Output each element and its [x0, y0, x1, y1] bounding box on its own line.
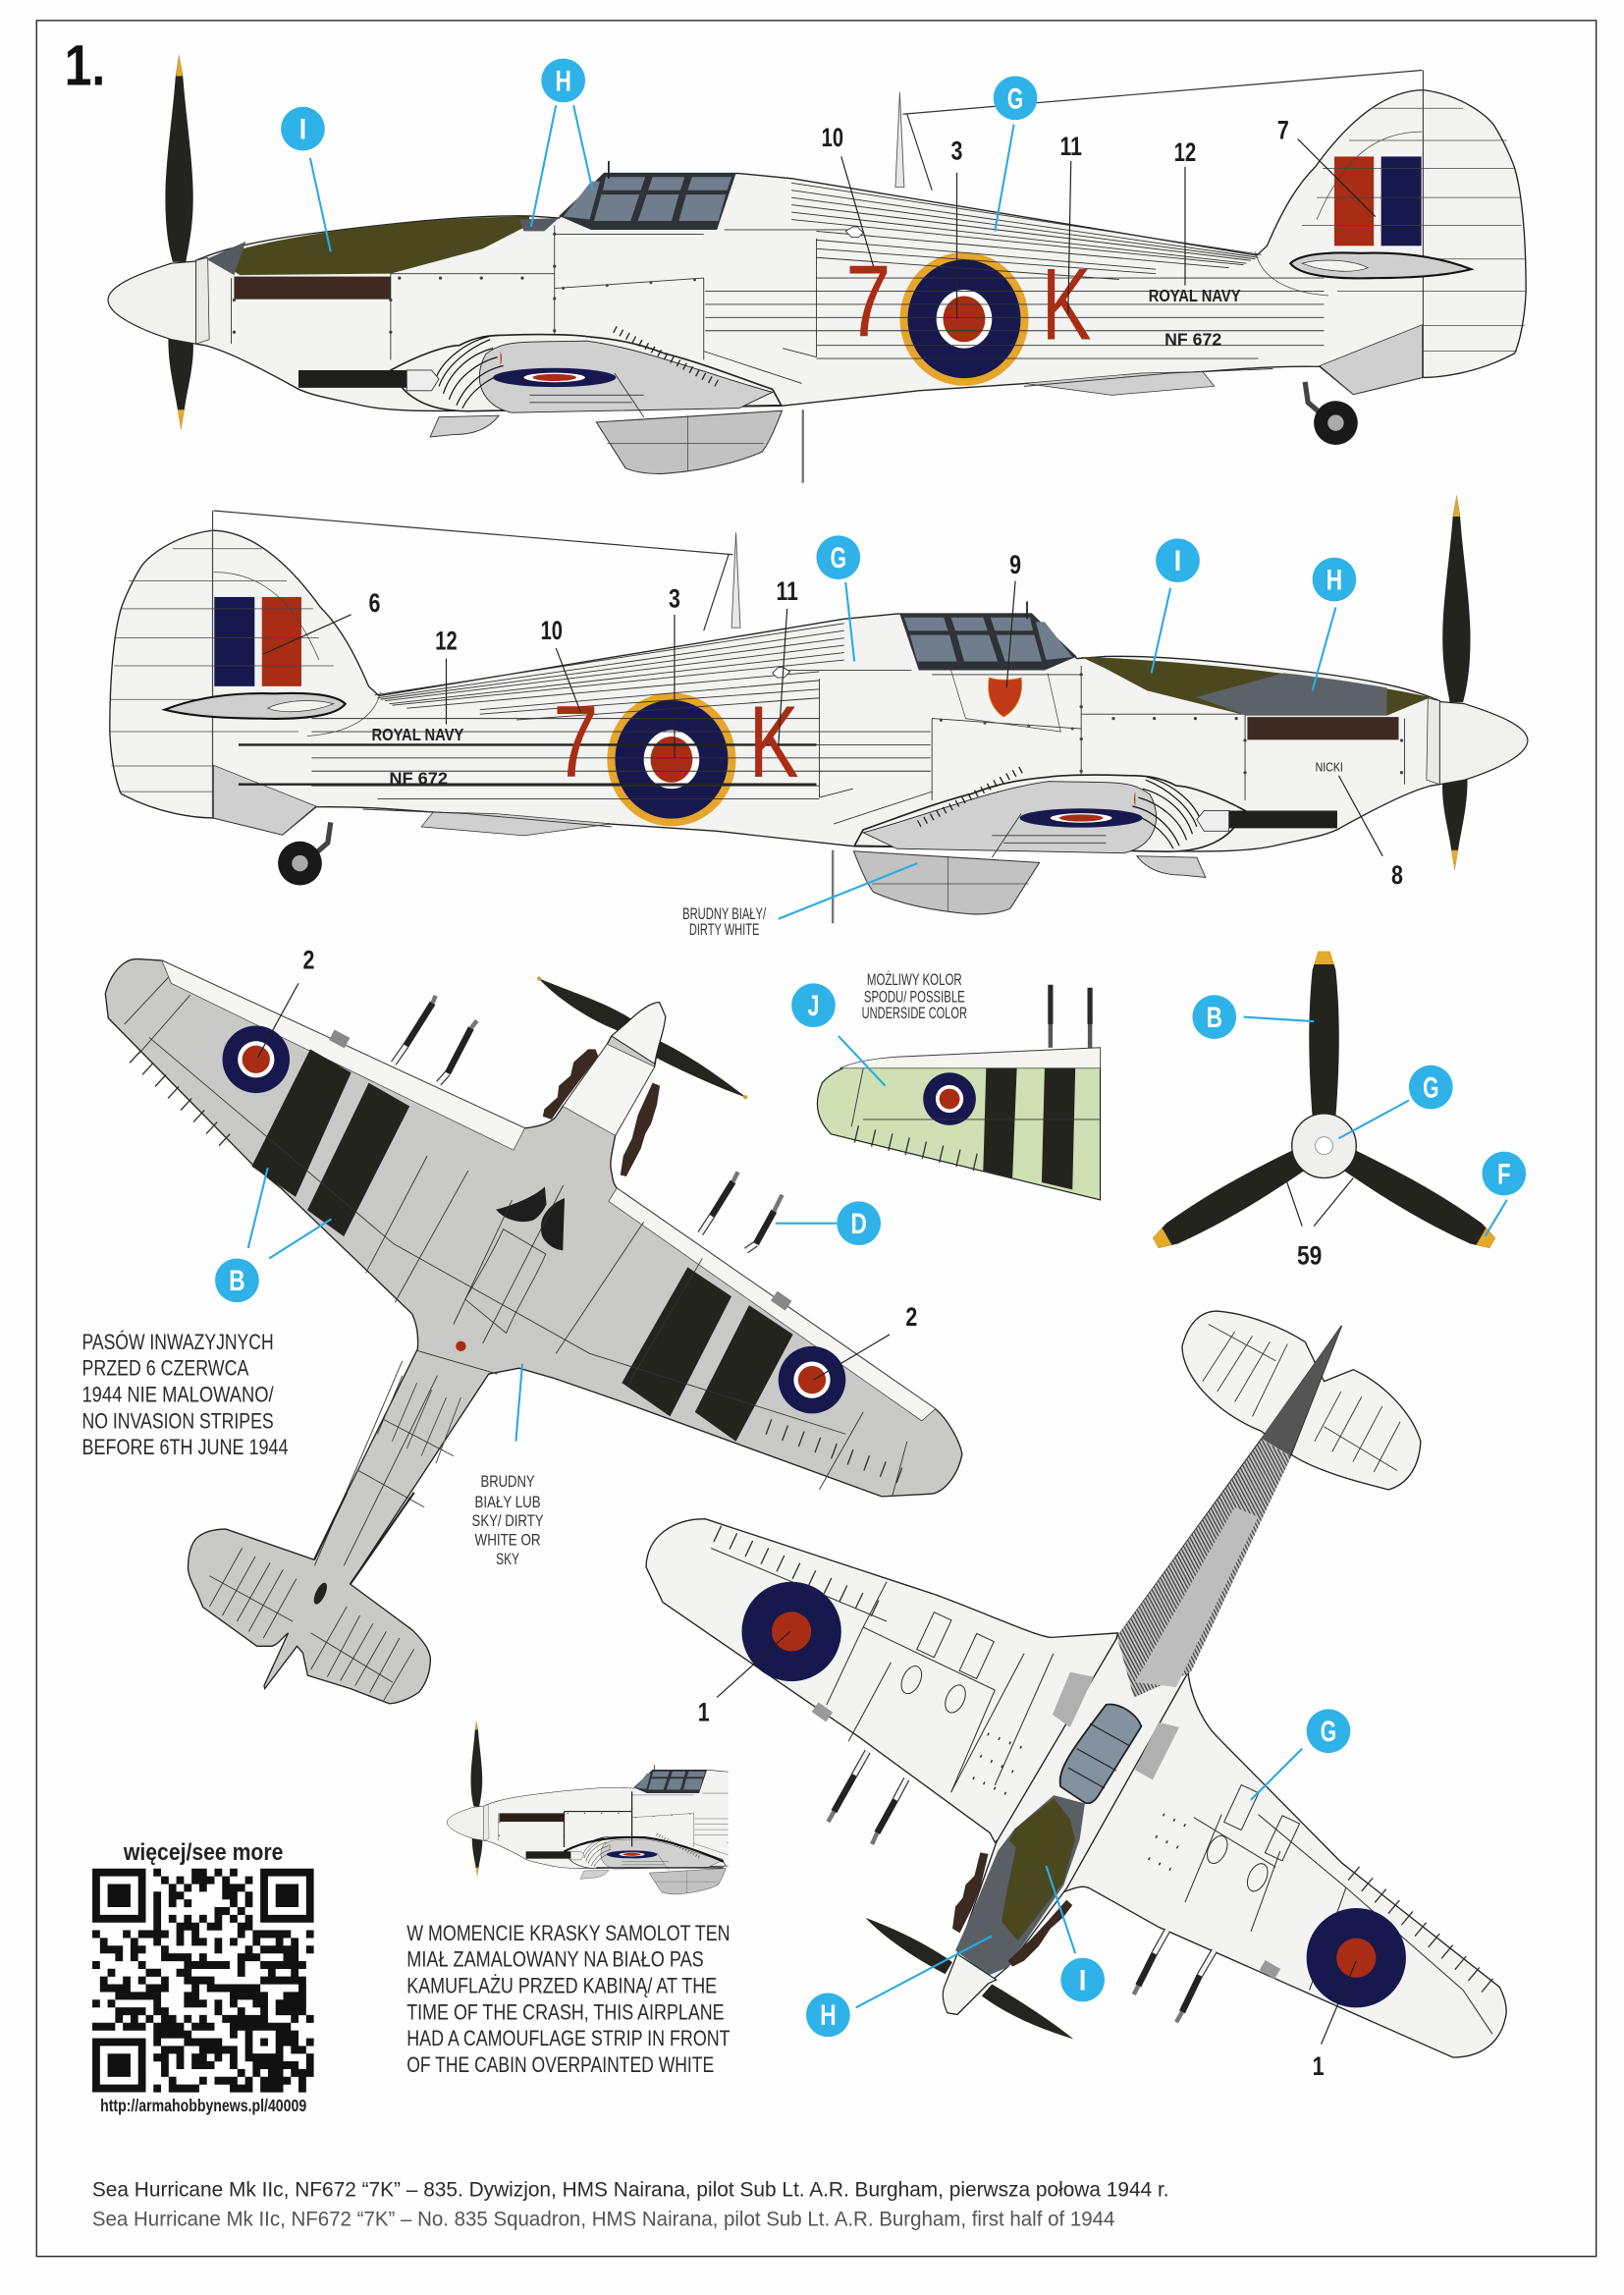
propeller	[537, 976, 747, 1099]
note: camouflage strip overpainted: W MOMENCIE KRASKY SAMOLOT TEN	[406, 1921, 731, 1945]
note: no invasion stripes: PRZED 6 CZERWCA	[81, 1356, 248, 1381]
callout: J: SPODU/ POSSIBLE	[864, 989, 965, 1007]
code letters and serial: NF 672	[1164, 330, 1221, 350]
propeller	[866, 1918, 1073, 2039]
callouts: underside: 2	[905, 1302, 917, 1332]
callouts: upper surface	[698, 1631, 1356, 2081]
aircraft: left side profile	[108, 54, 1526, 483]
code letters and serial: ROYAL NAVY	[1149, 286, 1241, 305]
fuselage	[945, 1326, 1341, 2014]
callouts: underside	[215, 945, 917, 1568]
right wing	[1063, 1672, 1506, 2057]
QR block	[92, 1839, 314, 2115]
canopy	[1060, 1704, 1141, 1803]
callouts: underside: 2	[302, 945, 314, 974]
callouts: side profile: 10	[822, 123, 843, 152]
code letters and serial: ROYAL NAVY	[371, 725, 463, 744]
callouts: side profile: G	[1007, 82, 1023, 115]
caption: Sea Hurricane Mk IIc, NF672 “7K” – No. 835 Squadron, HMS Nairana, pilot Sub Lt. A.R. Burgham, first half of 1944	[92, 2208, 1114, 2230]
invasion stripes	[251, 1049, 793, 1442]
callouts: side profile: 12	[1174, 137, 1196, 167]
propeller detail	[1148, 952, 1500, 1256]
spinner	[612, 1003, 666, 1064]
tailplanes	[1182, 1311, 1421, 1490]
note: no invasion stripes: 1944 NIE MALOWANO/	[81, 1382, 274, 1406]
callout: J: UNDERSIDE COLOR	[862, 1005, 967, 1022]
squadron badge	[951, 670, 1060, 732]
callouts: right profile: 6	[369, 588, 380, 618]
roundels	[741, 1582, 1406, 2007]
callouts: underside: SKY/ DIRTY	[472, 1512, 544, 1530]
note: no invasion stripes	[81, 1330, 289, 1459]
note: no invasion stripes: BEFORE 6TH JUNE 1944	[81, 1435, 289, 1459]
grey wing-root strips	[1053, 1672, 1179, 1779]
callouts: side profile: I	[299, 114, 306, 146]
note: camouflage strip overpainted	[406, 1921, 731, 2077]
callouts: underside: B	[229, 1265, 245, 1297]
note: camouflage strip overpainted: OF THE CABIN OVERPAINTED WHITE	[406, 2052, 714, 2077]
callouts: underside: SKY	[496, 1551, 519, 1568]
aircraft: upper surface	[646, 1311, 1506, 2057]
note: no invasion stripes: PASÓW INWAZYJNYCH	[81, 1330, 274, 1354]
note: camouflage strip overpainted: KAMUFLAŻU PRZED KABINĄ/ AT THE	[406, 1973, 717, 1997]
note: camouflage strip overpainted: HAD A CAMOUFLAGE STRIP IN FRONT	[406, 2026, 731, 2050]
note: no invasion stripes: NO INVASION STRIPES	[81, 1408, 274, 1433]
wing panel detail	[711, 1548, 1492, 2034]
callouts: propeller: 59	[1297, 1240, 1322, 1270]
QR block: więcej/see more	[123, 1839, 283, 1866]
camouflage	[206, 217, 559, 275]
callouts: upper surface: 1	[698, 1697, 710, 1726]
callouts: underside: BIAŁY LUB	[475, 1494, 541, 1511]
callouts: right profile: H	[1326, 564, 1342, 596]
code letters and serial	[845, 246, 1241, 362]
callout: J: J	[808, 990, 819, 1022]
small grey panels	[329, 1029, 350, 1048]
exhaust stacks	[234, 277, 391, 300]
callouts: side profile: 11	[1060, 132, 1082, 161]
callouts: right profile: 11	[776, 576, 798, 606]
callouts: propeller: G	[1423, 1072, 1438, 1105]
code letters and serial: 7	[845, 246, 891, 359]
callouts: underside: WHITE OR	[475, 1531, 541, 1549]
small grey panels	[812, 1702, 833, 1721]
fuselage tail spine	[314, 1493, 414, 1584]
exhaust stacks	[1247, 717, 1399, 739]
panel lines	[125, 977, 907, 1682]
heavy stringers	[239, 744, 816, 785]
callouts: right profile: I	[1174, 545, 1181, 577]
guns	[394, 996, 783, 1250]
spinner	[943, 1954, 997, 2014]
callouts: propeller: F	[1497, 1158, 1511, 1190]
inset guns	[1051, 985, 1090, 1024]
wheel wells	[496, 1186, 565, 1250]
code letters and serial: 7	[553, 685, 598, 799]
code letters and serial: K	[749, 685, 799, 799]
camouflage	[1081, 657, 1431, 716]
callouts: right profile: 8	[1391, 860, 1403, 890]
callouts: side profile	[281, 59, 1376, 319]
code letters and serial: NF 672	[389, 769, 448, 789]
callouts: underside: BRUDNY	[481, 1473, 535, 1491]
callouts: right profile	[263, 535, 1403, 939]
camouflage	[955, 1795, 1085, 1976]
aircraft: right side profile	[110, 495, 1528, 923]
callouts: right profile: DIRTY WHITE	[689, 921, 759, 939]
callouts: upper surface: 1	[1313, 2051, 1325, 2081]
airframe	[105, 959, 962, 1704]
callouts: right profile: G	[831, 542, 846, 574]
callouts: side profile: H	[555, 65, 571, 97]
roundels	[223, 1026, 845, 1413]
exhausts	[543, 1049, 660, 1176]
code letters and serial: NICKI	[1316, 760, 1343, 774]
exhausts	[952, 1852, 1072, 1967]
caption	[92, 2179, 1169, 2230]
QR code	[92, 1869, 314, 2093]
callout: J	[791, 970, 967, 1086]
rivet fields	[973, 1734, 1192, 1873]
callouts: upper surface: G	[1321, 1716, 1336, 1748]
rear fuselage stringers	[1117, 1439, 1291, 1697]
callouts: upper surface: H	[820, 1999, 837, 2032]
callouts: propeller: B	[1207, 1002, 1222, 1034]
note: camouflage strip overpainted: MIAŁ ZAMALOWANY NA BIAŁO PAS	[406, 1947, 704, 1972]
callouts: underside: D	[850, 1208, 867, 1240]
callouts: propeller	[1192, 995, 1526, 1270]
callout: J: MOŻLIWY KOLOR	[867, 970, 962, 989]
callouts: upper surface: I	[1079, 1964, 1086, 1996]
aircraft: underside with invasion stripes	[105, 959, 962, 1704]
white leading edges and cowl	[162, 960, 936, 1421]
inset: possible underside colour wing	[817, 985, 1101, 1200]
left wing	[646, 1519, 1117, 1842]
code letters and serial	[371, 685, 1343, 799]
caption: Sea Hurricane Mk IIc, NF672 “7K” – 835. Dywizjon, HMS Nairana, pilot Sub Lt. A.R. Burgham, pierwsza połowa 1944 r.	[92, 2179, 1169, 2202]
callouts: right profile: 9	[1009, 550, 1021, 579]
callouts: right profile: 10	[541, 616, 563, 645]
inset: nose overpainted white	[447, 1721, 729, 1895]
callouts: right profile: 12	[435, 627, 458, 656]
callouts: right profile: 3	[669, 583, 680, 613]
antenna mast and wire	[214, 511, 740, 630]
callouts: side profile: 7	[1277, 116, 1289, 145]
radiator duct	[465, 1229, 546, 1333]
guns	[828, 1752, 1215, 2022]
plate number: 1.	[65, 33, 105, 97]
note: camouflage strip overpainted: TIME OF THE CRASH, THIS AIRPLANE	[406, 1999, 725, 2024]
callouts: side profile: 3	[951, 136, 962, 165]
callouts: right profile: BRUDNY BIAŁY/	[682, 905, 766, 923]
code letters and serial: K	[1042, 248, 1092, 362]
QR block: http://armahobbynews.pl/40009	[100, 2096, 306, 2115]
antenna mast and wire	[895, 71, 1422, 191]
